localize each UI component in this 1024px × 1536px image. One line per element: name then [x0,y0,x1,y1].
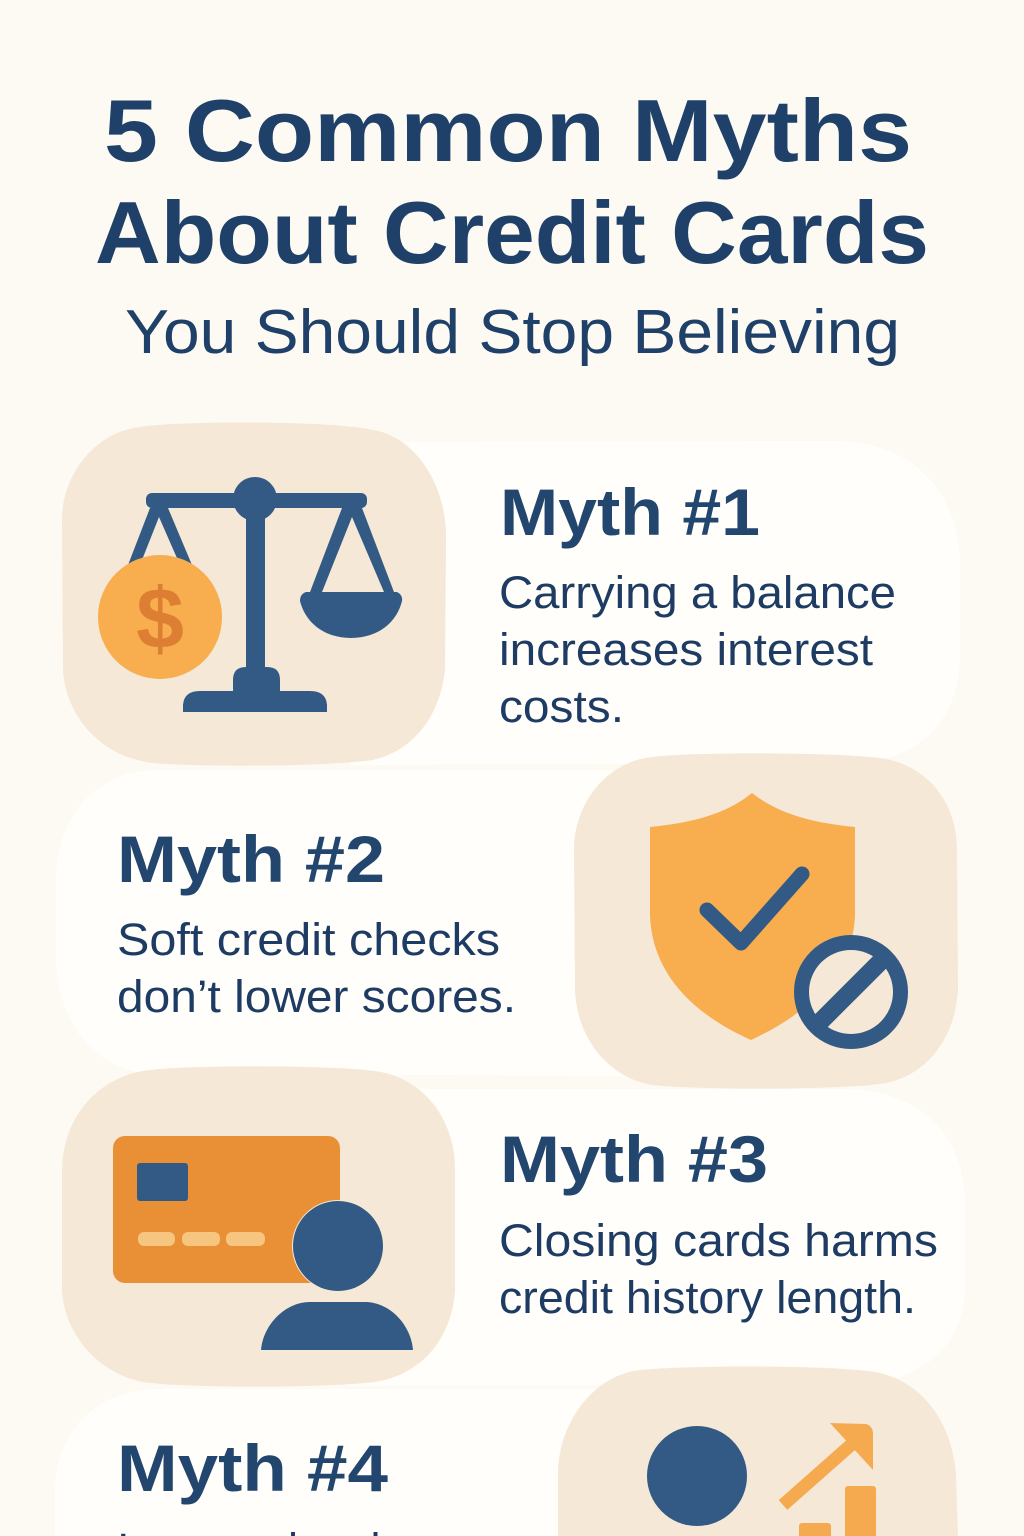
icon: person with rising chart [558,1366,958,1536]
panel: myth 2 [56,753,958,1089]
text: myth 1: increases interest [499,624,874,675]
text: myth 1: costs. [499,681,624,732]
heading: myth 1: Myth #1 [500,475,760,549]
text: myth 3 [499,1215,938,1323]
heading: myth 4: Myth #4 [117,1431,388,1505]
icon: scales with dollar coin [62,422,446,766]
text: myth 2: don’t lower scores. [117,971,516,1022]
panel: myth 3 [62,1066,965,1387]
text: myth 1 [499,567,896,732]
text: myth 3: credit history length. [499,1272,916,1323]
heading: myth 2: Myth #2 [117,822,385,896]
text: myth 1: Carrying a balance [499,567,896,618]
icon: scales with dollar coin: $ [136,571,184,667]
heading: myth 3: Myth #3 [500,1122,768,1196]
text: myth 2: Soft credit checks [117,914,500,965]
title [95,81,929,367]
icon: shield with check and prohibition sign [574,753,958,1089]
title: 5 Common Myths [104,81,912,180]
title: You Should Stop Believing [125,298,900,367]
text: myth 2 [117,914,516,1022]
title: About Credit Cards [95,183,929,282]
icon: credit card with person [62,1066,455,1387]
panel: myth 1 [62,422,960,766]
text: myth 3: Closing cards harms [499,1215,938,1266]
panel: myth 4 [55,1366,958,1536]
